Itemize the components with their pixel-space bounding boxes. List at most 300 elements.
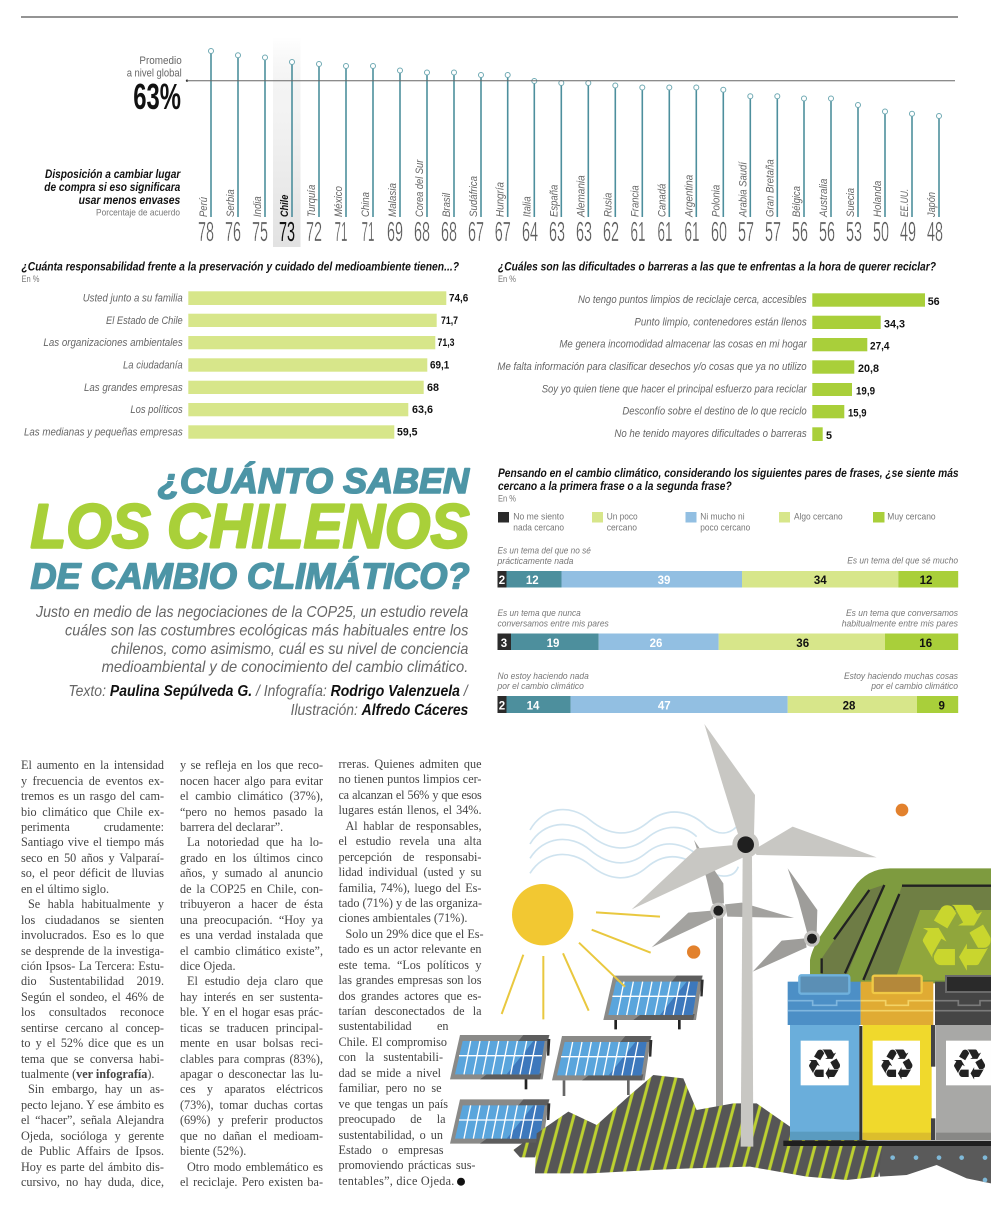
lollipop: Chile: Chile <box>279 195 291 217</box>
lollipop: Italia: 64 <box>522 216 538 247</box>
intro paragraph: Justo en medio de las negociaciones de la COP25, un estudio revela <box>35 604 468 621</box>
lollipop: Francia: Francia <box>629 185 641 217</box>
article text: column 1: tualmente (ver infografía). <box>21 1067 154 1081</box>
legend <box>498 512 936 534</box>
article text: column 2: barrera del declarar”. <box>180 820 283 834</box>
bar: Las medianas y pequeñas empresas: Las medianas y pequeñas empresas <box>24 426 183 438</box>
article text: column 2: y se refleja en los que reco- <box>180 758 323 772</box>
lollipop: Rusia: 62 <box>603 216 619 247</box>
lollipop: Arabia Saudí: 57 <box>738 216 754 247</box>
lollipop: Canadá <box>656 85 672 247</box>
article text: column 1: seco en 50 años y Valparaí- <box>21 851 164 865</box>
article text: column 1: tremos es un rasgo del cam- <box>21 789 164 803</box>
lollipop: Chile: 73 <box>279 216 295 247</box>
legend: No me siento <box>513 512 564 522</box>
article text: column 2: ces y aparatos eléctricos <box>180 1082 323 1096</box>
recycling bin: blue <box>788 975 861 1140</box>
bar: no clean points: 56 <box>928 296 940 308</box>
heading: barriers: ¿Cuáles son las dificultades o barreras a las que te enfrentas a la hora de querer reciclar? <box>498 260 937 274</box>
article text: column 2: clables para compras (83%), <box>180 1052 323 1066</box>
article text: column 3: Estado o empresas <box>338 1143 444 1157</box>
lollipop: Argentina: Argentina <box>683 175 695 218</box>
lollipop: Gran Bretaña: Gran Bretaña <box>764 159 776 217</box>
article text: column 3: ciones ambientales (71%). <box>338 911 467 925</box>
article text: column 2: el reciclaje. Pero existen ba- <box>180 1175 323 1189</box>
article text: column 1: involucrados. Eso es lo que <box>21 928 164 942</box>
bar: Usted junto a su familia: 74,6 <box>449 292 468 304</box>
article text: column 3: lugares están llenos, el 34%. <box>338 803 482 817</box>
bar: storage discomfort <box>559 338 890 353</box>
stacked row: knowledge: prácticamente nada <box>497 556 574 567</box>
lollipop: Turquía: Turquía <box>306 185 318 217</box>
article text: column 1: se desprende de la investiga- <box>21 944 164 958</box>
lollipop: Gran Bretaña <box>764 94 781 247</box>
legend: Un poco <box>607 512 638 522</box>
lollipop: Alemania <box>575 80 592 247</box>
lollipop: Corea del Sur: 68 <box>414 216 430 247</box>
lollipop: Japón <box>926 114 943 247</box>
article text: column 3: este tema. “Los políticos y <box>338 958 482 972</box>
bar: distrust of destination: Desconfío sobre el destino de lo que reciclo <box>622 406 807 418</box>
article text: column 2: dice Ojeda. <box>180 959 236 973</box>
lollipop: EE.UU.: EE.UU. <box>899 189 911 217</box>
stacked row: knowledge: 39 <box>658 575 670 587</box>
lollipop: Polonia: Polonia <box>710 185 722 217</box>
top rule <box>21 16 958 18</box>
stacked row: conversation <box>498 608 958 650</box>
sun <box>512 884 573 945</box>
article text: column 2: Otro modo emblemático es <box>187 1160 323 1174</box>
bar: full containers: Punto limpio, contenedores están llenos <box>634 316 807 328</box>
bar chart: recycling barriers <box>497 260 940 442</box>
article text: column 3: sustentabilidad, o un <box>338 1128 443 1142</box>
legend: cercano <box>607 522 637 534</box>
article text: column 1: perimenta crudamente: <box>21 820 164 834</box>
bar: La ciudadanía <box>123 358 449 372</box>
lollipop: España <box>548 80 565 247</box>
lollipop: Serbia: Serbia <box>225 189 237 217</box>
article text: column 3: ca alcanzan el 56% y que esos <box>338 788 482 802</box>
chart: willingness to change shop, lollipops by country <box>186 37 955 247</box>
article text: column 3: el estudio revela una alta <box>338 834 482 848</box>
lollipop: Perú <box>198 48 214 247</box>
icon: recycling: ♻ <box>806 1040 844 1090</box>
lollipop: Suecia: 53 <box>846 216 862 247</box>
bar: Las grandes empresas: Las grandes empresas <box>84 382 183 394</box>
article text: column 3: percepción de responsabi- <box>338 850 482 864</box>
article text: column 1: Sin embargo, hay un as- <box>28 1082 164 1096</box>
article text: column 3: preocupado de la <box>338 1112 446 1126</box>
icon: lime recycling symbol: ♻ <box>915 885 998 994</box>
stacked row: knowledge: 2 <box>499 575 505 587</box>
chart description: de compra si eso significara <box>44 182 181 194</box>
stacked row: action: No estoy haciendo nada <box>498 671 589 682</box>
bar: Las medianas y pequeñas empresas: 59,5 <box>397 426 418 438</box>
intro paragraph: chilenos, como asimismo, cuál es su nivel de conciencia <box>111 641 468 658</box>
title: DE CAMBIO CLIMÁTICO? <box>30 556 470 596</box>
lollipop: España: España <box>548 185 560 217</box>
lollipop: Suecia <box>845 102 862 247</box>
intro paragraph: medioambiental y de conocimiento del cambio climático. <box>102 659 468 676</box>
article text: column 3: lidad individual (usted y su <box>338 865 482 879</box>
article text: column 1: Ojeda, socióloga y gerente <box>21 1129 164 1143</box>
ground: striped hills <box>513 1075 991 1183</box>
article text: column 1: pecto lejano. Y ese ámbito es <box>21 1098 164 1112</box>
stacked row: knowledge: 34 <box>814 575 827 587</box>
stacked row: action: Estoy haciendo muchas cosas <box>844 671 958 682</box>
article text: column 1 <box>21 758 164 1189</box>
article text: column 2: una preocupación. “Hoy ya <box>180 913 323 927</box>
article text: column 1: en el último siglo. <box>21 882 109 896</box>
solar panel: middle right <box>552 1036 652 1096</box>
bar: storage discomfort: 27,4 <box>870 341 890 353</box>
lollipop: Malasia: Malasia <box>387 183 399 217</box>
lollipop: Rusia: Rusia <box>602 193 614 217</box>
stacked row: action: 14 <box>527 700 540 712</box>
article text: column 2: tribuyeron a hacer de ésta <box>180 897 323 911</box>
wind waves <box>530 810 738 878</box>
article text: column 1: Hoy es parte del ámbito dis- <box>21 1160 164 1174</box>
article text: column 2: ticas se traducen principal- <box>180 1021 323 1035</box>
article text: column 3: las grandes empresas son los <box>338 973 482 987</box>
stacked row: knowledge <box>497 546 958 588</box>
lollipop: Hungría: Hungría <box>495 182 507 217</box>
lollipop: Gran Bretaña: 57 <box>765 216 781 247</box>
article text: column 3: tado (71%) y de las organiza- <box>338 896 482 910</box>
solar panel: top <box>603 976 704 1029</box>
article text: column 1: dio Sustentabilidad 2019. <box>21 974 164 988</box>
stacked row: knowledge: Es un tema del que no sé <box>498 546 591 556</box>
bar: La ciudadanía: 69,1 <box>430 360 449 372</box>
lollipop: Malasia: 69 <box>387 216 403 247</box>
article text: column 2: (73%), tomar duchas cortas <box>180 1098 323 1112</box>
stacked row: knowledge: Es un tema del que sé mucho <box>847 556 958 566</box>
article text: column 2: hay interés en ser sustenta- <box>180 990 323 1004</box>
lollipop: Holanda: Holanda <box>872 181 884 217</box>
lollipop: Serbia: 76 <box>225 216 241 247</box>
article text: column 1: el “hacer”, señala Alejandra <box>21 1113 164 1127</box>
article text: column 1: de Public Affairs de Ipsos. <box>21 1144 164 1158</box>
article text: column 1: so, el peor déficit de lluvias <box>21 866 164 880</box>
lollipop: Sudáfrica: 67 <box>468 216 484 247</box>
lollipop: Sudáfrica: Sudáfrica <box>468 176 480 217</box>
stacked row: knowledge: 12 <box>526 575 539 587</box>
article text: column 1: Según el sondeo, el 46% de <box>21 990 164 1004</box>
article text: column 1: to y el 52% dice que es un <box>21 1036 164 1050</box>
lollipop: México <box>333 64 348 247</box>
article text: column 1: tema que se conversa habi- <box>21 1052 164 1066</box>
stacked row: action: 47 <box>658 700 671 712</box>
recycling bin: gray <box>931 976 993 1140</box>
bar chart: responsibility: En % <box>22 274 40 285</box>
chart description: Porcentaje de acuerdo <box>96 208 180 218</box>
bar: Los políticos: Los políticos <box>130 404 183 416</box>
bar: lack of information: Me falta información para clasificar desechos y/o cosas que ya no utilizo <box>497 361 807 373</box>
article text: column 2: de la COP25 en Chile, con- <box>180 882 323 896</box>
article text: column 3 <box>338 757 484 1188</box>
title: LOS CHILENOS <box>30 492 470 562</box>
article text: column 1: y frecuencia de eventos ex- <box>21 774 164 788</box>
lollipop: Polonia <box>710 87 727 247</box>
bar: La ciudadanía: La ciudadanía <box>123 360 183 372</box>
bar: storage discomfort: Me genera incomodidad almacenar las cosas en mi hogar <box>559 339 808 351</box>
chart: willingness to change shop, lollipops by country: 71 <box>334 216 348 247</box>
stacked row: conversation: conversamos entre mis pares <box>498 618 609 630</box>
solar panel: middle left <box>450 1035 550 1089</box>
lollipop: Italia <box>521 78 538 247</box>
lollipop: Hungría: 67 <box>495 216 511 247</box>
stacked row: conversation: 16 <box>919 638 932 650</box>
lollipop: Turquía <box>306 62 322 247</box>
orange dots <box>687 804 908 959</box>
bar: lack of information: 20,8 <box>858 363 879 375</box>
article text: column 1: Santiago vive el tiempo más <box>21 835 164 849</box>
lollipop: Perú: 78 <box>198 216 214 247</box>
bar: no clean points: No tengo puntos limpios de reciclaje cerca, accesibles <box>578 294 807 306</box>
chart description: Disposición a cambiar lugar <box>45 169 181 181</box>
bar: full containers: 34,3 <box>884 318 905 330</box>
article text: column 1: ción Ipsos- La Tercera: Estu- <box>21 959 164 973</box>
icon: recycling: ♻ <box>951 1040 989 1090</box>
legend: Algo cercano <box>794 512 843 522</box>
legend: Muy cercano <box>887 512 936 522</box>
bar: Las organizaciones ambientales <box>43 336 454 349</box>
article text: column 2: que no dañan el medioam- <box>180 1129 323 1143</box>
article text: column 3: rreras. Quienes admiten que <box>338 757 482 771</box>
article text: column 3: Solo un 29% dice que el Es- <box>346 927 484 941</box>
lollipop: Serbia <box>225 53 241 247</box>
byline <box>68 683 469 719</box>
chart: willingness to change shop, lollipops by country: 71 <box>362 216 374 247</box>
bar: distrust of destination: 15,9 <box>848 408 866 420</box>
lollipop: Brasil: 68 <box>441 216 457 247</box>
article text: column 1: Se habla habitualmente y <box>28 897 164 911</box>
stacked bar chart: closeness to climate change <box>497 466 959 713</box>
article text: column 3: con la sustentabili- <box>338 1050 443 1064</box>
byline: Ilustración: Alfredo Cáceres <box>291 702 469 719</box>
lollipop: Arabia Saudí: Arabia Saudí <box>737 161 749 218</box>
stacked row: action <box>497 671 958 713</box>
lollipop: Australia: Australia <box>818 179 830 218</box>
bar: full containers <box>634 316 905 330</box>
lollipop: Holanda <box>872 109 889 247</box>
lollipop: Bélgica <box>791 96 808 247</box>
stacked row: conversation: 19 <box>547 638 559 650</box>
lollipop: Japón: 48 <box>927 216 943 247</box>
wind turbine: small <box>753 868 820 972</box>
bar: El Estado de Chile: El Estado de Chile <box>106 315 183 327</box>
stacked row: action: por el cambio climático <box>870 681 958 692</box>
article text: column 1: El aumento en la intensidad <box>21 758 164 772</box>
lollipop: Japón: Japón <box>926 192 938 218</box>
article text: column 3: tado es un actor relevante en <box>338 942 482 956</box>
global average line <box>186 80 955 82</box>
article text: column 1: sentirse cercano al concep- <box>21 1021 164 1035</box>
lollipop: Corea del Sur: Corea del Sur <box>414 159 426 217</box>
bar: Las medianas y pequeñas empresas <box>24 425 418 439</box>
lollipop: India: India <box>252 196 264 217</box>
bar: Los políticos <box>130 403 433 416</box>
bar: no difficulties: 5 <box>826 430 832 442</box>
solar panel: bottom left <box>450 1099 550 1144</box>
lollipop: Alemania: 63 <box>576 216 592 247</box>
illustration: renewable energy and recycling <box>450 724 998 1183</box>
bar chart: responsibility <box>22 260 468 439</box>
article text: column 2: grado en los últimos cinco <box>180 851 323 865</box>
lollipop: Chile <box>279 60 295 247</box>
global average label <box>127 55 182 117</box>
lollipop: Perú: Perú <box>198 197 210 217</box>
bar: Las organizaciones ambientales: 71,3 <box>438 337 454 349</box>
article text: column 3: familiar, pero no se <box>338 1081 442 1095</box>
bar: no clean points <box>578 293 940 308</box>
article text: column 2: ble. Y en el hogar esas prác- <box>180 1005 323 1019</box>
article text: column 2: biente (52%). <box>180 1144 246 1158</box>
legend: nada cercano <box>513 522 564 534</box>
wind turbine: large blades <box>632 724 877 909</box>
byline: Texto: Paulina Sepúlveda G. / Infografía: Rodrigo Valenzuela / <box>68 683 469 700</box>
lollipop: Alemania: Alemania <box>575 175 587 218</box>
sun rays <box>502 912 660 1019</box>
heading: responsibility: ¿Cuánta responsabilidad frente a la preservación y cuidado del medioambiente tienen...? <box>22 260 460 274</box>
article text: column 2: (69%) y preferir productos <box>180 1113 323 1127</box>
lollipop: Rusia <box>602 83 619 247</box>
bar: Las grandes empresas <box>84 381 439 394</box>
article text: column 2: La notoriedad que ha lo- <box>187 835 323 849</box>
legend: poco cercano <box>700 522 750 534</box>
lollipop: China: China <box>360 192 372 217</box>
bar: Las grandes empresas: 68 <box>427 382 439 394</box>
lollipop: Canadá: Canadá <box>656 184 668 217</box>
wind turbine: middle <box>652 840 794 1113</box>
bar: no difficulties: No he tenido mayores dificultades o barreras <box>614 428 807 440</box>
stacked row: conversation: Es un tema que nunca <box>498 608 581 619</box>
article text: column 2: El estudio deja claro que <box>187 974 323 988</box>
lollipop: Brasil <box>441 70 457 247</box>
lollipop: Francia <box>629 85 646 247</box>
stacked row: action: 28 <box>843 700 856 712</box>
lollipop: México: México <box>333 186 345 217</box>
bar: Usted junto a su familia <box>83 291 468 305</box>
bar chart: recycling barriers: En % <box>498 274 516 285</box>
bar: Usted junto a su familia: Usted junto a su familia <box>83 292 183 304</box>
recycling bin: yellow <box>859 976 933 1140</box>
intro paragraph: cuáles son las costumbres ecológicas más habituales entre los <box>65 622 468 640</box>
article text: column 3: Chile. El compromiso <box>338 1035 447 1049</box>
article text: column 1: los ciudadanos se sienten <box>21 913 164 927</box>
chart: willingness to change shop, lollipops by country: 61 <box>658 216 672 247</box>
lollipop: España: 63 <box>549 216 565 247</box>
article text: column 2: apagar o desconectar las lu- <box>180 1067 323 1081</box>
article text: column 2: años, y sumado al anuncio <box>180 866 323 880</box>
article text: column 3: tentables”, dice Ojeda. <box>338 1174 455 1188</box>
lollipop: Brasil: Brasil <box>441 193 453 217</box>
lollipop: China <box>360 64 376 247</box>
stacked row: conversation: Es un tema que conversamos <box>846 608 958 619</box>
chart: willingness to change shop, lollipops by country: 61 <box>684 216 700 247</box>
intro paragraph <box>35 604 468 676</box>
chart description: usar menos envases <box>79 195 180 207</box>
stacked row: conversation: 36 <box>796 638 809 650</box>
stacked row: conversation: habitualmente entre mis pares <box>842 618 958 630</box>
lollipop: India: 75 <box>252 216 268 247</box>
Chile highlight column <box>273 37 300 247</box>
chart: willingness to change shop, lollipops by country: 61 <box>630 216 646 247</box>
stacked row: action: 2 <box>499 700 505 712</box>
lollipop: Malasia <box>387 68 403 247</box>
lollipop: EE.UU. <box>899 111 916 247</box>
heading: stacked chart: cercano a la primera frase o a la segunda frase? <box>498 479 732 493</box>
article text: column 2: “pero no hemos pasado la <box>180 805 323 819</box>
lollipop: Argentina <box>683 85 700 247</box>
article text: column 3: no tienen puntos limpios cer- <box>338 772 482 786</box>
global average label: 63% <box>133 76 181 117</box>
bar: main effort: Soy yo quien tiene que hacer el principal esfuerzo para reciclar <box>542 384 808 396</box>
bar: main effort: 19,9 <box>856 386 875 398</box>
article text: column 3: promoviendo prácticas sus- <box>338 1158 476 1172</box>
stacked row: knowledge: 12 <box>920 575 932 587</box>
article text: column 3: ve que tengas un país <box>338 1097 448 1111</box>
bar: Las organizaciones ambientales: Las organizaciones ambientales <box>43 337 183 349</box>
lollipop: Turquía: 72 <box>306 216 322 247</box>
title <box>30 462 470 596</box>
stacked row: conversation: 3 <box>501 638 507 650</box>
heading: stacked chart <box>498 466 959 504</box>
title: ¿CUÁNTO SABEN <box>158 462 470 501</box>
lollipop: India <box>252 55 268 247</box>
lollipop: EE.UU.: 49 <box>900 216 916 247</box>
heading: stacked chart: En % <box>498 494 516 504</box>
stacked row: action: por el cambio climático <box>497 681 584 692</box>
lollipop: Holanda: 50 <box>873 216 889 247</box>
lollipop: Corea del Sur <box>414 70 430 247</box>
article text: column 3: familia, 74%), luego del Es- <box>338 880 482 894</box>
stacked row: conversation: 26 <box>650 638 662 650</box>
article text: column 3: sustentabilidad en <box>338 1019 448 1033</box>
bar: Los políticos: 63,6 <box>412 404 433 416</box>
article text: column 1: cursivo, no hay duda, dice, <box>21 1175 164 1189</box>
article text: column 3: Al hablar de responsables, <box>346 819 482 833</box>
bar: El Estado de Chile <box>106 314 458 327</box>
lollipop: Italia: Italia <box>521 196 533 217</box>
article text: column 3: dos grandes actores que es- <box>338 989 482 1003</box>
lollipop: Bélgica: 56 <box>792 216 808 247</box>
green vehicle with recycling sign <box>810 868 991 984</box>
global average label: Promedio <box>139 55 182 67</box>
lollipop: Arabia Saudí <box>737 94 754 247</box>
legend: Ni mucho ni <box>700 512 745 522</box>
lollipop: Suecia: Suecia <box>845 188 857 217</box>
article text: column 3: tarían desconectados de la <box>338 1004 482 1018</box>
platform bar <box>783 1141 991 1146</box>
end-of-article bullet <box>457 1178 465 1186</box>
lollipop: Australia: 56 <box>819 216 835 247</box>
lollipop: Polonia: 60 <box>711 216 727 247</box>
lollipop: Bélgica: Bélgica <box>791 186 803 217</box>
article text: column 1: los consultados reconoce <box>21 1005 164 1019</box>
article text: column 2 <box>180 758 323 1189</box>
bar: El Estado de Chile: 71,7 <box>441 315 458 327</box>
article text: column 2: el cambio climático (37%), <box>180 789 323 803</box>
chart description <box>44 169 181 218</box>
stacked row: action: 9 <box>938 700 945 712</box>
lollipop: Australia <box>818 96 835 247</box>
lollipop: Hungría <box>495 72 511 247</box>
article text: column 2: mente en usar bolsas reci- <box>180 1036 323 1050</box>
icon: recycling: ♻ <box>878 1040 916 1090</box>
article text: column 1: bio climático que Chile ex- <box>21 805 164 819</box>
global average label: a nivel global <box>127 68 182 80</box>
